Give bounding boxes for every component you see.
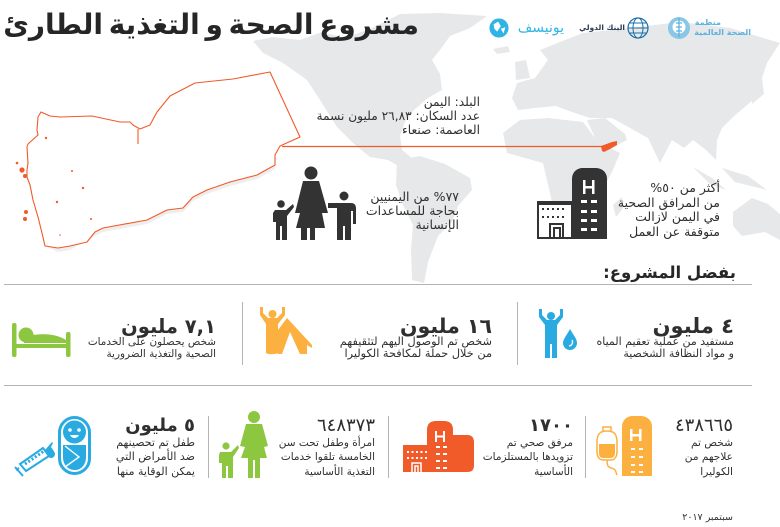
stat: 4 million: مستفيد من عملية تعقيم المياه	[596, 334, 734, 348]
logo: World Bank	[579, 17, 649, 39]
stat: 5 million children vaccinated	[116, 415, 195, 478]
text: over 50 percent of facilities: من المرافق الصحية	[618, 194, 720, 210]
date: سبتمبر ٢٠١٧	[682, 512, 733, 523]
connector line to Yemen on world map	[282, 141, 617, 152]
stat: 648373 women and children: الخامسة تلقوا خدمات	[281, 451, 375, 463]
stat: 7.1 million: الصحية والتغذية الضرورية	[106, 348, 216, 360]
stat: 7.1 million	[88, 315, 216, 360]
icon: baby and syringe	[14, 416, 91, 477]
stat: 648373 women and children	[279, 415, 375, 478]
stat: 5 million children vaccinated: ضد الأمراض التي	[116, 450, 195, 463]
stat: 7.1 million: ٧,١ مليون	[121, 315, 216, 338]
stat: 1700 facilities: ١٧٠٠	[529, 415, 573, 436]
stat: 4 million	[596, 314, 734, 360]
country facts text: البلد: اليمن	[424, 95, 480, 109]
text: 77 percent in need	[366, 189, 459, 232]
stat: 1700 facilities	[483, 415, 573, 478]
logo: WHO: الصحة العالمية	[694, 28, 751, 37]
logo: UNICEF	[489, 18, 564, 38]
icon: hospital dark	[537, 168, 607, 239]
text: 77 percent in need: الإنسانية	[416, 217, 459, 232]
logo: World Bank: البنك الدولي	[579, 23, 625, 32]
icon: person with tent	[260, 307, 312, 354]
text: over 50 percent of facilities: أكثر من ٥٠%	[650, 180, 720, 195]
stat: 4 million: ٤ مليون	[653, 314, 734, 338]
logo: UNICEF: يونيسف	[518, 20, 564, 36]
stat: 438665 cholera treated: شخص تم	[691, 437, 733, 449]
country facts text: العاصمة: صنعاء	[402, 123, 480, 137]
icon: green bed	[12, 323, 70, 357]
map: Yemen outline	[16, 72, 301, 252]
title: مشروع الصحة و التغذية الطارئ	[3, 8, 419, 41]
stat: 1700 facilities: مرفق صحي تم	[507, 437, 573, 449]
country facts text	[317, 95, 480, 137]
stat: 438665 cholera treated: الكوليرا	[700, 466, 733, 478]
icon: family silhouette	[273, 166, 356, 240]
logo: WHO: منظمة	[695, 18, 721, 27]
stat: 5 million children vaccinated: ٥ مليون	[125, 415, 195, 436]
heading: thanks to the project: بفضل المشروع:	[603, 263, 736, 282]
stat: 438665 cholera treated: علاجهم من	[685, 451, 733, 463]
stat: 4 million: و مواد النظافة الشخصية	[623, 347, 734, 360]
stat: 648373 women and children: امرأة وطفل تحت سن	[279, 437, 375, 449]
stat: 648373 women and children: التغذية الأساسية	[304, 466, 375, 478]
stat: 438665 cholera treated: ٤٣٨٦٦٥	[675, 415, 733, 436]
text: 77 percent in need: ٧٧% من اليمنيين	[370, 189, 459, 204]
icon: person with water drop	[539, 309, 577, 358]
text: over 50 percent of facilities: متوقفة عن العمل	[629, 224, 720, 238]
stat: 5 million children vaccinated: طفل تم تحصينهم	[116, 436, 195, 449]
stat: 16 million: ١٦ مليون	[400, 314, 492, 338]
icon: hospital and IV bag orange	[596, 416, 652, 476]
icon: green woman and child	[219, 411, 268, 478]
stat: 5 million children vaccinated: يمكن الوقاية منها	[117, 465, 195, 478]
stat: 1700 facilities: تزويدها بالمستلزمات	[483, 451, 573, 463]
stat: 438665 cholera treated	[675, 415, 733, 478]
stat: 648373 women and children: ٦٤٨٣٧٣	[317, 415, 375, 436]
icon: orange hospital	[403, 421, 474, 472]
text: over 50 percent of facilities	[618, 180, 720, 239]
stat: 7.1 million: شخص يحصلون على الخدمات	[88, 336, 216, 348]
stat: 16 million: من خلال حملة لمكافحة الكوليرا	[344, 347, 492, 360]
stat: 16 million: شخص تم الوصول اليهم لتثقيفهم	[340, 334, 492, 348]
logo: WHO	[668, 17, 751, 39]
text: 77 percent in need: بحاجة للمساعدات	[366, 203, 459, 218]
stat: 1700 facilities: الأساسية	[534, 466, 573, 478]
stat: 16 million	[340, 314, 492, 360]
country facts text: عدد السكان: ٢٦,٨٣ مليون نسمة	[317, 109, 480, 123]
text: over 50 percent of facilities: في اليمن لازالت	[635, 209, 720, 224]
